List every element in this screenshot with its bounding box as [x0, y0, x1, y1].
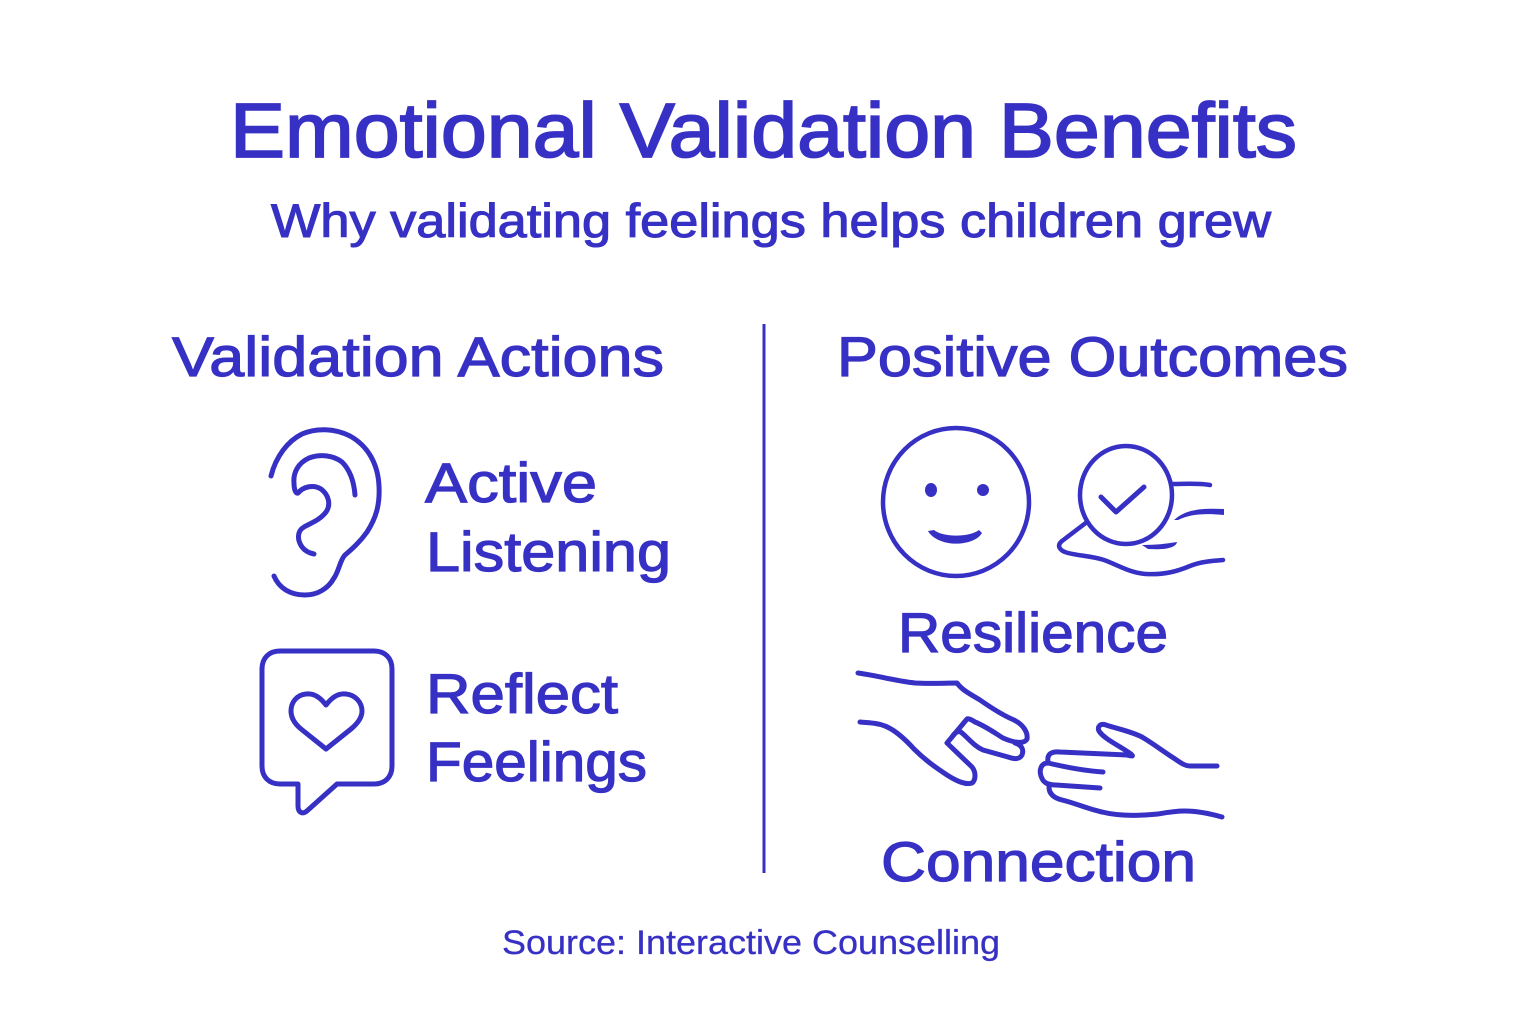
label: resilience: Resilience [898, 601, 1168, 664]
label: reflect feelings [426, 662, 647, 793]
subtitle: Why validating feelings helps children grew [271, 194, 1272, 247]
central divider [762, 324, 766, 873]
label: active listening [425, 451, 671, 583]
icon: hand holding check [1059, 446, 1224, 574]
label: active listening: Listening [426, 520, 671, 583]
icon: smiley face [883, 428, 1029, 576]
source note: Source: Interactive Counselling [502, 924, 1000, 962]
icon: ear [271, 430, 379, 595]
icon: speech bubble with heart [262, 651, 392, 813]
label: reflect feelings: Feelings [426, 730, 647, 793]
label: connection: Connection [881, 830, 1196, 893]
heading: positive outcomes: Positive Outcomes [837, 325, 1348, 388]
label: active listening: Active [425, 451, 597, 514]
title: Emotional Validation Benefits [230, 88, 1297, 174]
heading: validation actions: Validation Actions [172, 325, 664, 388]
label: reflect feelings: Reflect [426, 662, 618, 725]
icon: reaching hands [858, 673, 1222, 817]
